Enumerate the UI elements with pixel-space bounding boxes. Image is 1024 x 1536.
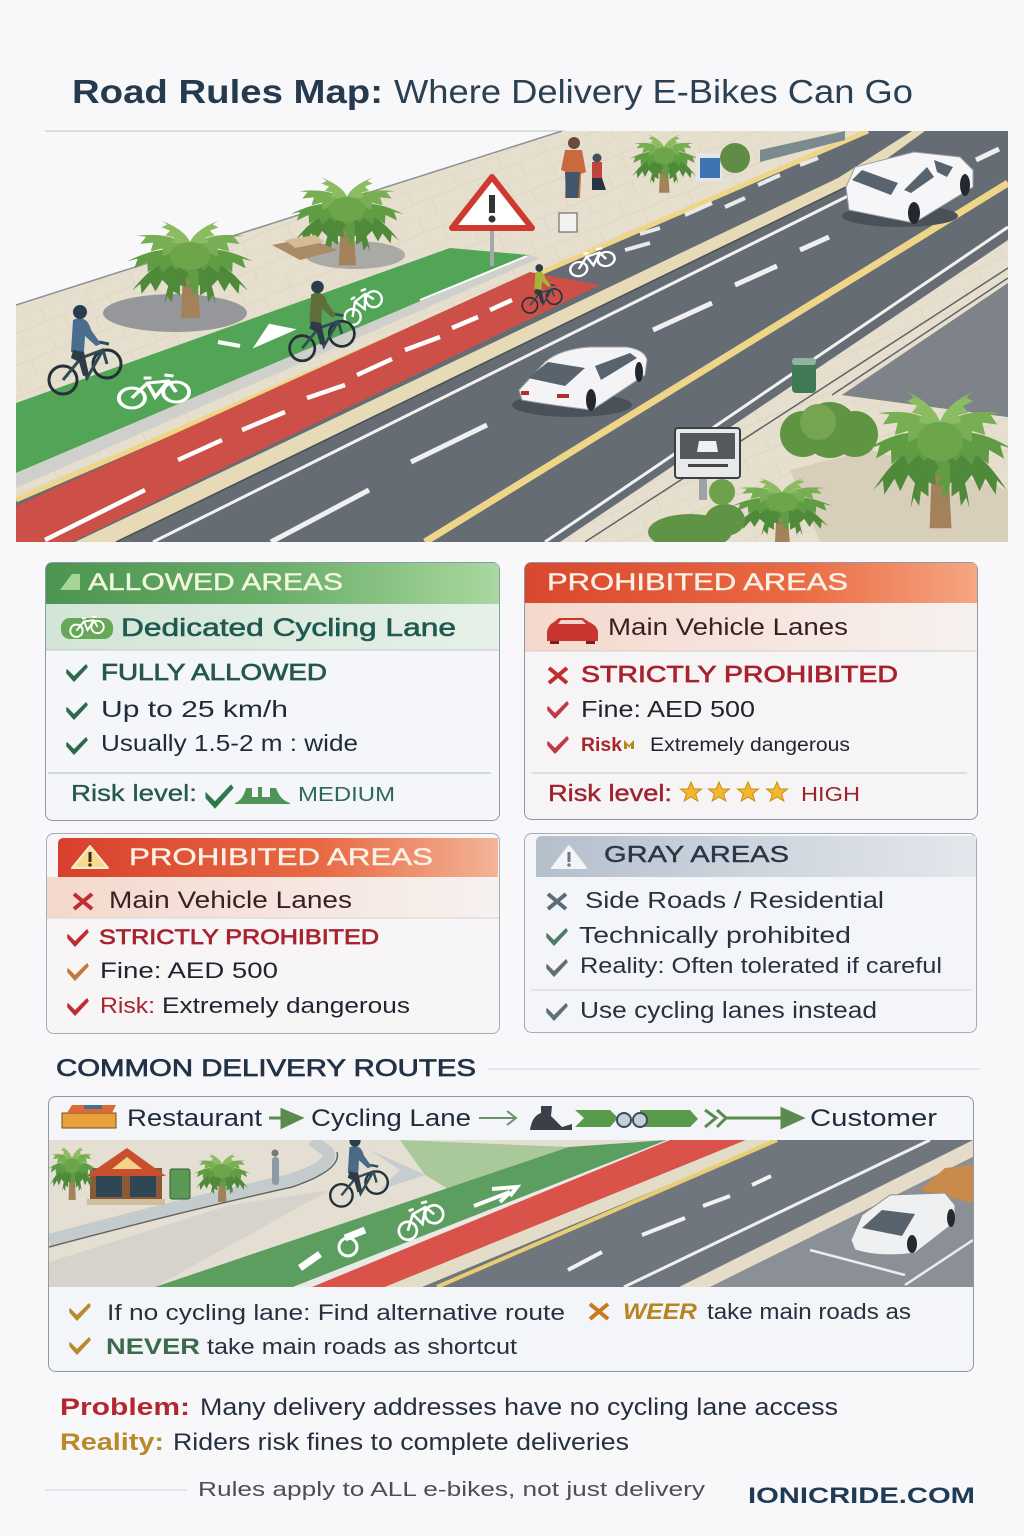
gray list: Technically prohibited [579, 922, 851, 948]
route notes [70, 1299, 911, 1359]
parked car [851, 1193, 955, 1255]
prohibited risk level: Risk level: [548, 780, 672, 806]
small palm [193, 1150, 251, 1202]
route flow row [62, 1105, 937, 1132]
prohibited header bar: PROHIBITED AREAS [547, 569, 848, 596]
palm low [733, 478, 832, 542]
gray list: Use cycling lanes instead [580, 997, 877, 1023]
allowed header bar: ALLOWED AREAS [88, 569, 343, 596]
beige divider [75, 131, 925, 542]
white car [512, 347, 647, 417]
prohibited list: STRICTLY PROHIBITED [581, 661, 898, 687]
bush right [780, 402, 878, 458]
gray list [531, 887, 972, 1023]
information sign [675, 428, 740, 500]
yellow edge line [16, 131, 868, 500]
restaurant [86, 1148, 166, 1205]
pedestrians [561, 137, 606, 198]
prohibited details list [68, 926, 410, 1018]
footer note: Rules apply to ALL e-bikes, not just delivery [198, 1479, 705, 1501]
panel: allowed areas [46, 562, 500, 820]
gray extension markings [567, 158, 818, 278]
cyclist [330, 1135, 388, 1207]
route notes: NEVER [106, 1334, 200, 1359]
bench [272, 235, 338, 260]
prohibited header bar with warning icon: PROHIBITED AREAS [129, 844, 433, 871]
shrubs low [648, 479, 745, 542]
panel: prohibited areas right [524, 562, 978, 820]
icon: restaurant [62, 1105, 116, 1128]
footer brand: IONICRIDE.COM [748, 1483, 975, 1508]
allowed risk level: Risk level: [71, 780, 197, 806]
rider on red [522, 264, 562, 313]
prohibited list: Fine: AED 500 [581, 696, 755, 722]
palm right [874, 392, 1008, 528]
allowed risk level [71, 780, 395, 808]
panel: gray areas [524, 834, 976, 1032]
allowed list: Up to 25 km/h [101, 696, 288, 722]
icon: rider and green chevrons [530, 1106, 726, 1130]
route road scene [48, 1135, 973, 1287]
gray list: Reality: Often tolerated if careful [580, 953, 942, 978]
center dashes [271, 149, 999, 542]
road map illustration [16, 130, 1013, 550]
barrier [760, 131, 845, 162]
tree 3 [630, 134, 696, 193]
blue kiosk [696, 153, 722, 181]
allowed list: FULLY ALLOWED [101, 659, 327, 685]
problem statement: Problem: [60, 1394, 190, 1421]
route flow row: Customer [810, 1105, 937, 1132]
truck edge [920, 1165, 973, 1203]
main vehicle lanes subheader [47, 877, 499, 918]
tree 1 [126, 214, 254, 318]
main vehicle lanes subheader: Main Vehicle Lanes [109, 887, 352, 914]
white van [842, 152, 973, 227]
prohibited risk level [548, 780, 860, 806]
shrub top [720, 143, 750, 173]
prohibited details list: Extremely dangerous [162, 993, 410, 1018]
green bin [792, 358, 816, 393]
reality statement: Riders risk fines to complete deliveries [173, 1429, 629, 1456]
left plants [48, 1143, 96, 1200]
prohibited subheader: Main Vehicle Lanes [608, 614, 848, 641]
lane bike marks [300, 1187, 517, 1268]
section heading: common delivery routes: COMMON DELIVERY ROUTES [56, 1055, 476, 1082]
reality statement: Reality: [60, 1429, 164, 1456]
gray header bar [536, 836, 976, 877]
title: Road Rules Map: [72, 73, 383, 110]
prohibited list: Risk [581, 735, 622, 756]
route notes: take main roads as shortcut [207, 1334, 517, 1359]
arrow [726, 1109, 802, 1127]
route notes: WEER [623, 1299, 697, 1324]
allowed header bar [46, 563, 499, 604]
prohibited header bar [525, 563, 977, 603]
gray header bar: GRAY AREAS [604, 841, 789, 867]
yellow main line [425, 183, 1008, 542]
route notes: If no cycling lane: Find alternative route [107, 1300, 565, 1325]
prohibited details list: STRICTLY PROHIBITED [99, 926, 379, 949]
title [72, 73, 913, 110]
allowed subheader [46, 604, 499, 650]
prohibited details list: Fine: AED 500 [100, 958, 278, 983]
red lane [16, 272, 600, 542]
title: Where Delivery E-Bikes Can Go [394, 73, 913, 110]
pedestrian [272, 1150, 279, 1185]
allowed risk level: MEDIUM [298, 784, 395, 806]
rider on green 1 [49, 305, 121, 394]
allowed subheader: Dedicated Cycling Lane [121, 614, 456, 642]
tree 2 [289, 172, 405, 265]
gray list: Side Roads / Residential [585, 887, 884, 913]
allowed list [67, 659, 358, 756]
upper sidewalk [16, 131, 880, 510]
parking lot [842, 283, 1008, 417]
arrow [269, 1110, 301, 1127]
prohibited list: Extremely dangerous [650, 735, 850, 756]
panel: route [48, 1096, 973, 1372]
asphalt [16, 131, 1008, 542]
prohibited header bar with warning icon [58, 838, 498, 877]
problem statement: Many delivery addresses have no cycling lane access [200, 1394, 838, 1421]
green cycling lane [16, 248, 540, 488]
prohibited subheader [525, 603, 977, 651]
prohibited risk level: HIGH [801, 784, 860, 806]
prohibited details list: Risk: [100, 993, 155, 1018]
warning sign [452, 177, 532, 266]
lower sidewalk [560, 240, 1008, 542]
prohibited list [548, 661, 898, 756]
shadows [103, 294, 247, 332]
rider on green 2 [290, 281, 354, 361]
green kiosk [170, 1169, 190, 1199]
panel: prohibited areas left [46, 834, 500, 1034]
route flow row: Cycling Lane [311, 1105, 471, 1132]
route flow row: Restaurant [127, 1105, 262, 1132]
route notes: take main roads as [707, 1299, 911, 1324]
small bollard [559, 213, 577, 232]
arrow [479, 1111, 516, 1125]
allowed list: Usually 1.5-2 m : wide [101, 730, 358, 756]
